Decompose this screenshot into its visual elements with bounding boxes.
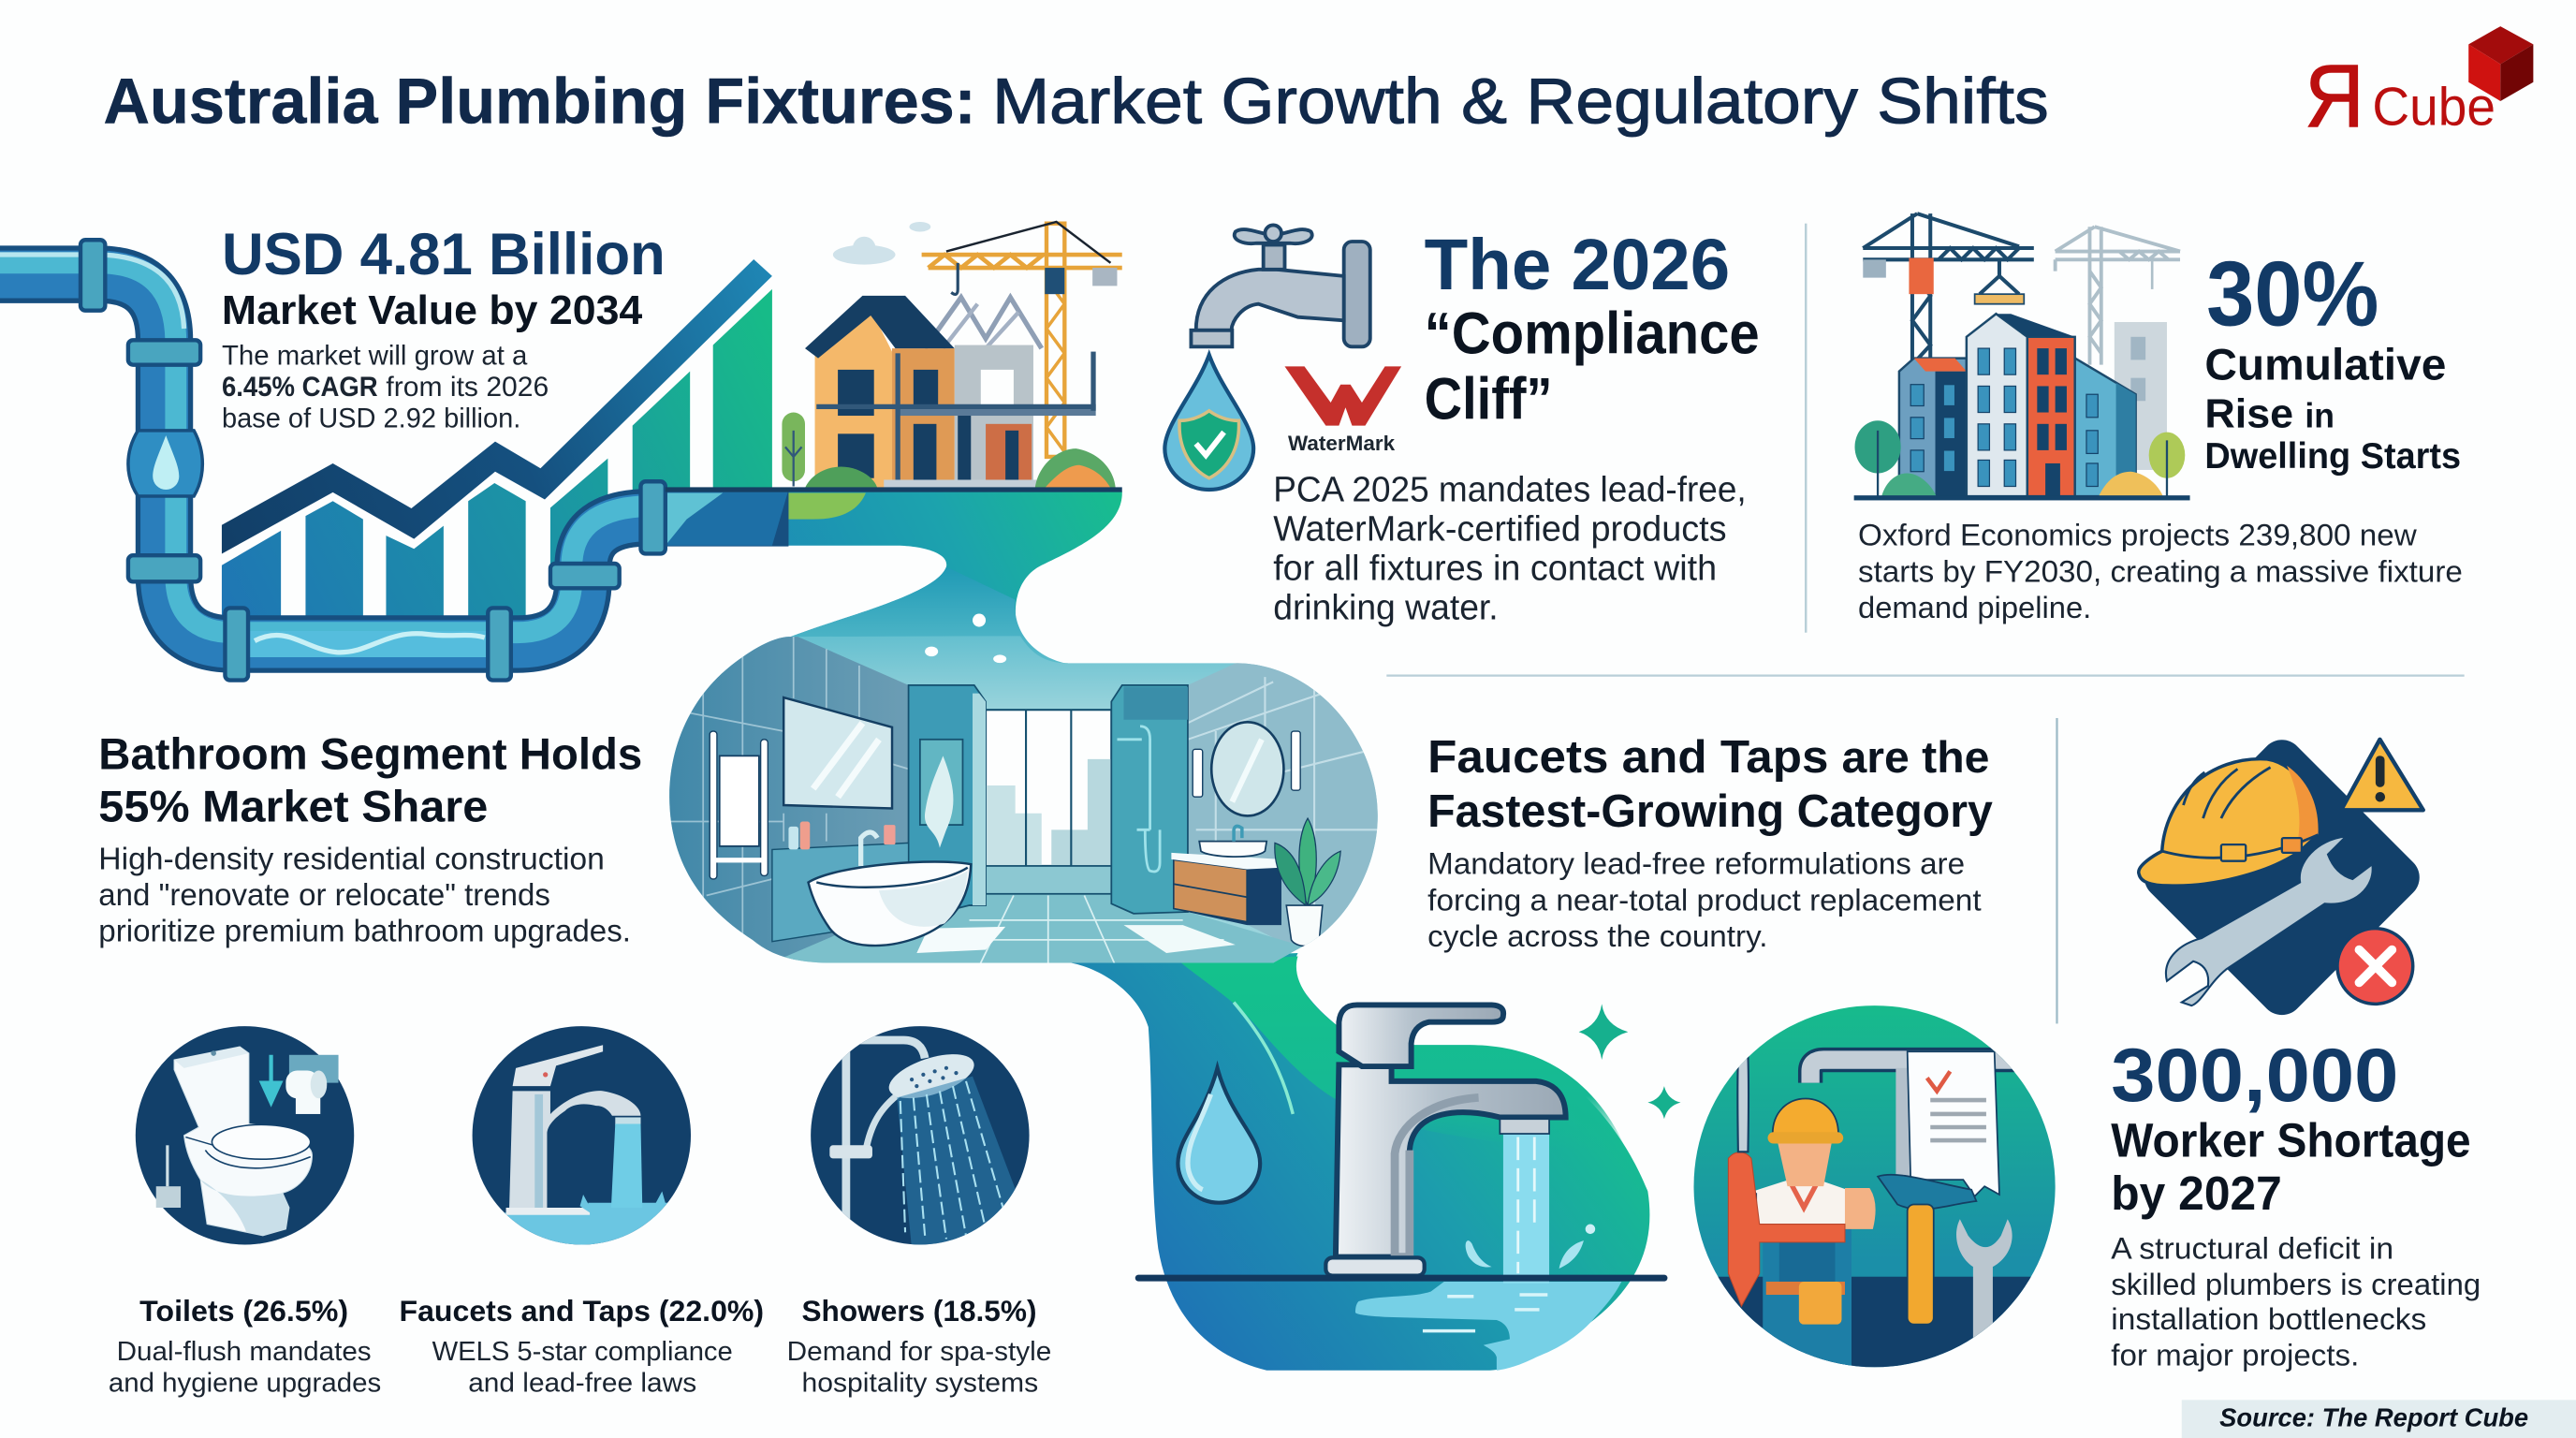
hammer [1878, 1175, 1976, 1210]
toilet brush [156, 1145, 181, 1208]
worker shortage text: 300,000 [2111, 1034, 2398, 1118]
dwelling starts body text: Oxford Economics projects 239,800 new [1858, 519, 2417, 552]
WaterMark logo: WaterMark [1288, 432, 1396, 455]
face [1778, 1142, 1832, 1186]
faucets fastest-growing text: forcing a near-total product replacement [1427, 883, 1982, 917]
dwelling starts stat [2204, 242, 2461, 477]
icon: hard hat and wrench on diamond [2135, 731, 2428, 1024]
crane [922, 222, 1122, 457]
logo: Report Cube: Cube [2372, 77, 2496, 137]
trend line [222, 259, 772, 553]
pipe bulge with drop [128, 431, 202, 496]
compliance body text [1273, 469, 1747, 627]
left wall [669, 637, 908, 961]
flush arrow [262, 1055, 280, 1103]
compliance body text: WaterMark-certified products [1273, 508, 1727, 548]
title: Australia Plumbing Fixtures: [104, 66, 976, 138]
faucets caption: Faucets and Taps (22.0%) [399, 1294, 764, 1328]
round mirror and sconces [1211, 722, 1283, 815]
logo: Report Cube: Я [2305, 47, 2364, 146]
icon: cranes and apartment buildings [1854, 213, 2190, 500]
market value text: USD 4.81 Billion [222, 222, 666, 287]
flanges [80, 240, 666, 681]
title: Market Growth & Regulatory Shifts [992, 66, 2049, 138]
dwelling starts body text: starts by FY2030, creating a massive fixture [1858, 554, 2463, 588]
logo: Report Cube [2305, 26, 2533, 146]
bathroom segment text: and "renovate or relocate" trends [98, 878, 550, 913]
title [104, 66, 2049, 138]
bathroom segment text: High-density residential construction [98, 842, 605, 876]
market value text: Market Value by 2034 [222, 287, 643, 333]
red x badge [2337, 929, 2413, 1004]
seat [212, 1124, 311, 1159]
compliance body text: PCA 2025 mandates lead-free, [1273, 469, 1747, 508]
compliance body text: for all fixtures in contact with [1273, 549, 1717, 588]
dark crane [1863, 213, 2034, 365]
worker shortage text: Worker Shortage [2111, 1114, 2471, 1167]
pipe system [0, 240, 788, 681]
water drop with shield [1164, 355, 1253, 490]
icon: plumber worker circle [1694, 1005, 2056, 1367]
faucet body [1336, 1064, 1566, 1257]
buildings [1899, 359, 1967, 496]
bathroom segment text: 55% Market Share [98, 783, 488, 832]
right wall [1189, 663, 1378, 949]
water droplets on stream [925, 614, 1006, 663]
house [805, 296, 1096, 488]
worker shortage text: for major projects. [2111, 1338, 2359, 1372]
worker shortage text [2111, 1034, 2481, 1372]
dwelling starts stat: Dwelling Starts [2204, 436, 2461, 477]
worker body [1756, 1181, 1845, 1224]
counter line [1135, 1275, 1667, 1282]
pedestal shading [200, 1180, 289, 1236]
compliance cliff heading [1425, 225, 1760, 433]
wall mirror [783, 697, 892, 809]
compliance cliff heading: The 2026 [1425, 225, 1730, 305]
market value text [222, 222, 666, 433]
gray crane and building [2056, 227, 2180, 470]
hard hat [1773, 1098, 1838, 1134]
water stream [1503, 1132, 1549, 1284]
warning triangle [2341, 740, 2423, 810]
bathroom segment text [98, 729, 642, 949]
faucets caption [399, 1294, 764, 1399]
pipe and document [1810, 1060, 2029, 1083]
construction scene: house and crane [666, 222, 1122, 492]
towel rail [710, 731, 768, 879]
window [986, 710, 1111, 866]
toilet icon [136, 1026, 354, 1244]
tree and bushes [782, 413, 805, 481]
sparkles [1579, 1004, 1628, 1060]
faucets fastest-growing text: Mandatory lead-free reformulations are [1427, 847, 1965, 881]
clouds [833, 222, 930, 265]
faucets fastest-growing text: are the [1841, 733, 1989, 783]
worker shortage text: A structural deficit in [2111, 1231, 2393, 1265]
dwelling starts body text [1858, 519, 2463, 624]
showers caption [787, 1294, 1051, 1399]
dwelling starts stat: in [2305, 396, 2334, 434]
bathroom illustration [657, 624, 1397, 970]
faucets fastest-growing text: Fastest-Growing Category [1427, 786, 1994, 837]
toilets caption: Dual-flush mandates [117, 1337, 372, 1367]
tap [1191, 225, 1370, 346]
toilet roll [285, 1055, 339, 1114]
worker shortage text: skilled plumbers is creating [2111, 1268, 2481, 1301]
toilets caption: and hygiene upgrades [109, 1369, 381, 1399]
ledge, bottles, towel [772, 843, 909, 942]
vanity [1189, 868, 1281, 925]
lower water stream [1071, 953, 1649, 1371]
wrench [2166, 836, 2373, 1005]
compliance cliff heading: Cliff” [1425, 367, 1553, 433]
source bar: Source: The Report Cube [2219, 1402, 2528, 1431]
drop [1178, 1068, 1260, 1203]
wrench [1956, 1219, 2012, 1338]
worker shortage text: by 2027 [2111, 1167, 2282, 1220]
faucets fastest-growing text [1427, 732, 1994, 953]
ground line [666, 487, 1122, 492]
overalls [1763, 1223, 1852, 1372]
faucets fastest-growing text: cycle across the country. [1427, 919, 1767, 953]
compliance cliff heading: “Compliance [1425, 301, 1760, 366]
dwelling starts stat: Rise [2204, 390, 2293, 436]
source bar [2182, 1400, 2576, 1438]
puddle [1355, 1282, 1621, 1371]
hard hat [2139, 759, 2319, 886]
faucets caption: and lead-free laws [468, 1369, 696, 1399]
gray frame house [925, 298, 1042, 483]
icon: large faucet with water [1135, 1004, 1680, 1371]
market value text: The market will grow at a [222, 341, 528, 372]
belt and pouch [1766, 1282, 1845, 1295]
showers caption: hospitality systems [801, 1369, 1038, 1399]
dwelling starts stat: 30% [2206, 242, 2378, 345]
market value text: 6.45% CAGR [222, 372, 378, 403]
bathroom segment text: prioritize premium bathroom upgrades. [98, 915, 631, 949]
toilet silhouette [174, 1047, 312, 1236]
fixture captions [109, 1294, 1051, 1399]
arm and tool [1845, 1188, 1876, 1229]
bathtub [809, 862, 971, 946]
upper water stream [716, 492, 1122, 690]
bathroom segment text: Bathroom Segment Holds [98, 729, 642, 779]
faucets caption: WELS 5-star compliance [432, 1337, 733, 1367]
showers caption: Demand for spa-style [787, 1337, 1051, 1367]
market value text: base of USD 2.92 billion. [222, 403, 520, 433]
faucets fastest-growing text: Faucets and Taps [1427, 732, 1828, 783]
compliance body text: drinking water. [1273, 588, 1499, 627]
toilets caption: Toilets (26.5%) [139, 1294, 348, 1328]
WaterMark logo [1284, 366, 1401, 455]
worker shortage text: installation bottlenecks [2111, 1302, 2426, 1336]
tap and watermark icon group [1164, 225, 1401, 490]
dwelling starts stat: Cumulative [2204, 340, 2446, 389]
floor [784, 895, 1303, 962]
plant [1275, 818, 1340, 946]
columns [909, 685, 986, 920]
trees and bushes [1855, 420, 1901, 473]
shower icon [811, 1026, 1032, 1249]
showers caption: Showers (18.5%) [801, 1294, 1036, 1328]
dwelling starts body text: demand pipeline. [1858, 591, 2091, 624]
market value text: from its 2026 [386, 372, 549, 403]
faucet icon [472, 1026, 691, 1245]
pond [716, 493, 866, 520]
toilets caption [109, 1294, 381, 1399]
shower [1117, 726, 1160, 872]
bar chart: market growth [222, 259, 772, 618]
